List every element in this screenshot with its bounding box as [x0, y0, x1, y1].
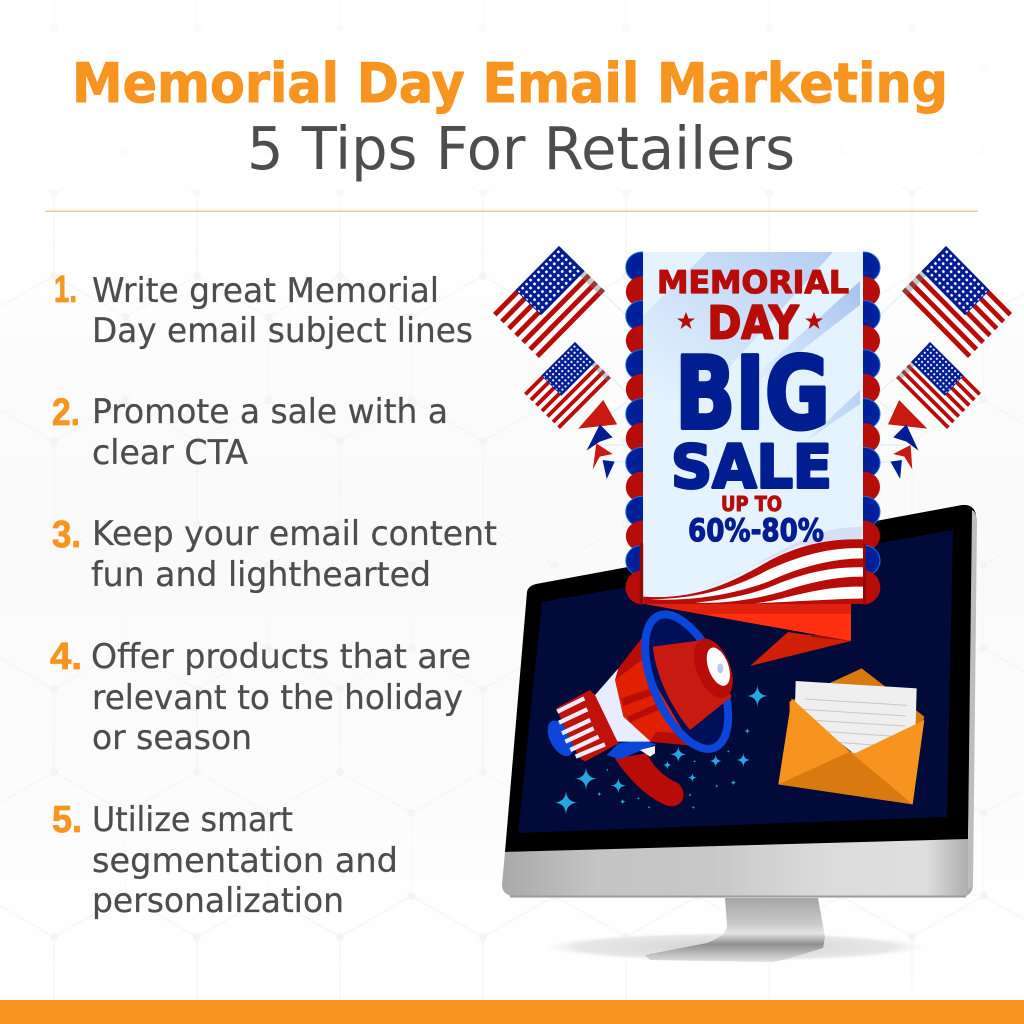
- tip 4: relevant to the holiday: [92, 678, 463, 718]
- tips list: [50, 269, 497, 921]
- megaphone ring: [628, 603, 745, 761]
- tip 4: 4.: [50, 636, 82, 678]
- star right: [805, 312, 823, 329]
- megaphone lower clip: [607, 740, 657, 759]
- tip 4: [50, 636, 471, 758]
- tip 3: [52, 514, 497, 595]
- tip 2: [52, 392, 448, 473]
- icon: envelope: [778, 668, 924, 804]
- tip 1: Write great Memorial: [92, 271, 439, 311]
- tip 3: fun and lighthearted: [91, 555, 431, 595]
- monitor shadow: [535, 932, 935, 962]
- subtitle: 5 Tips For Retailers: 5 Tips For Retailers: [247, 114, 795, 183]
- tip 2: 2.: [52, 392, 80, 434]
- icon: flag top right: [902, 246, 1012, 358]
- megaphone cone: [615, 638, 692, 746]
- banner scalloped edges: [625, 252, 880, 605]
- icon: sparkles: [554, 685, 768, 815]
- tip 5: personalization: [92, 881, 344, 921]
- monitor body silver: [502, 838, 973, 897]
- megaphone handle: [615, 753, 684, 806]
- icon: flag lower left: [524, 342, 611, 429]
- megaphone ring interior: [628, 603, 745, 761]
- banner sheen bands: [643, 252, 862, 590]
- banner text: DAY: DAY: [708, 296, 800, 350]
- monitor stand: [645, 898, 825, 962]
- monitor bezel: [505, 505, 976, 852]
- envelope letter: [795, 681, 917, 753]
- tip 2: clear CTA: [92, 433, 248, 473]
- tip 1: 1.: [54, 269, 77, 311]
- tip 3: Keep your email content: [92, 514, 497, 554]
- megaphone end cap: [542, 716, 579, 760]
- tip 4: or season: [92, 718, 252, 758]
- banner text: MEMORIAL: MEMORIAL: [657, 265, 849, 301]
- icon: flag top left: [493, 246, 605, 358]
- envelope front: [778, 698, 924, 804]
- tip 3: 3.: [52, 514, 81, 556]
- megaphone striped grip: [556, 690, 618, 762]
- icon: megaphone: [542, 603, 745, 806]
- tip 5: 5.: [52, 799, 82, 841]
- icon: flag lower right: [896, 342, 981, 429]
- monitor screen: [518, 530, 953, 833]
- pennants right: [888, 400, 927, 479]
- tip 2: Promote a sale with a: [92, 392, 448, 432]
- pennants left: [578, 400, 617, 479]
- sale banner: [625, 252, 880, 605]
- ribbon: [645, 604, 851, 666]
- megaphone inner cup: [653, 641, 732, 730]
- tip 4: Offer products that are: [91, 637, 471, 677]
- banner wave stripes: [640, 539, 866, 604]
- banner text: discount range: 60%-80%: [688, 513, 824, 549]
- megaphone white body: [589, 668, 651, 742]
- banner text: BIG: BIG: [675, 335, 830, 452]
- title line: Memorial Day Email Marketing: Memorial Day Email Marketing: [72, 52, 948, 115]
- banner text: UP TO: UP TO: [721, 492, 782, 516]
- title: [72, 52, 948, 183]
- star left: [677, 312, 695, 329]
- footer bar: [0, 1000, 1024, 1024]
- tip 5: Utilize smart: [92, 800, 293, 840]
- banner panel: [643, 252, 863, 604]
- tip 5: [52, 799, 398, 921]
- banner text: SALE: SALE: [671, 432, 832, 502]
- icon: desktop monitor: [502, 505, 977, 962]
- envelope back: [789, 668, 924, 733]
- icon: streamers: [578, 295, 927, 479]
- tip 1: [54, 269, 473, 351]
- tip 5: segmentation and: [92, 841, 398, 881]
- tip 1: Day email subject lines: [92, 311, 473, 351]
